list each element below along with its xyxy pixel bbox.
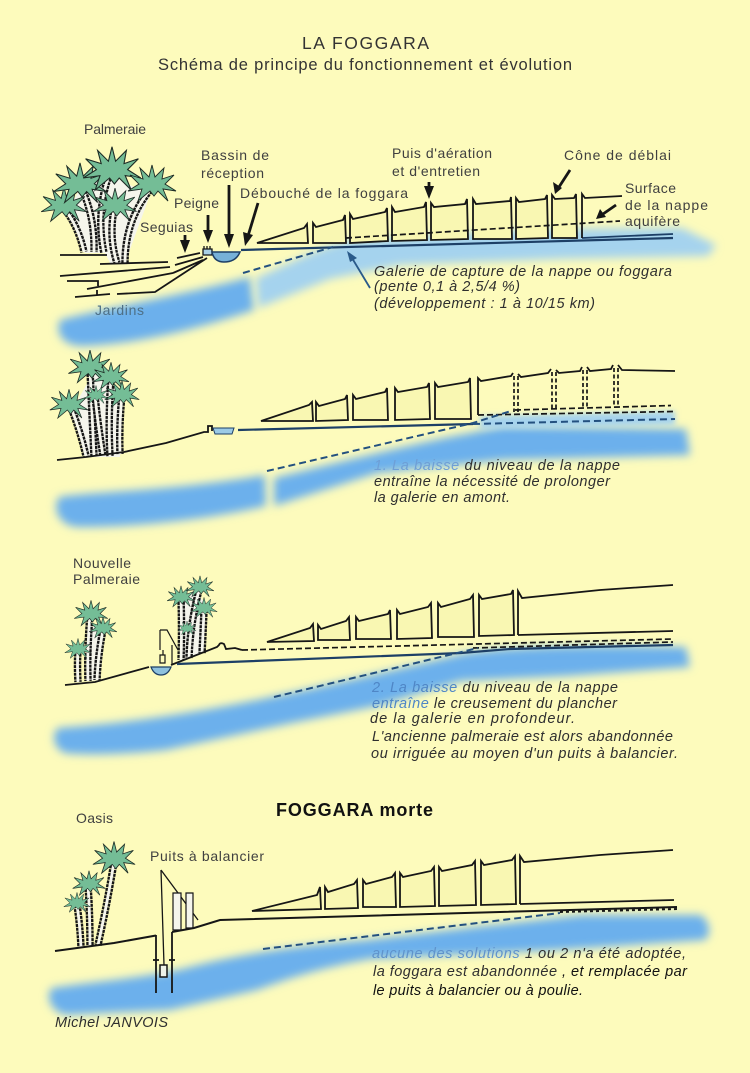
water table dashed line <box>346 221 620 238</box>
reception basin <box>212 252 240 262</box>
dashed levels <box>242 639 673 697</box>
ground profile <box>55 907 677 951</box>
upstream water surface line <box>582 234 673 238</box>
water table <box>49 915 709 1015</box>
title: LA FOGGARA <box>302 33 429 53</box>
former water level dashed line <box>243 247 333 273</box>
pond <box>151 667 171 675</box>
water table <box>56 411 690 527</box>
label: Nouvelle Palmeraie: Palmeraie <box>73 571 140 587</box>
caption 2: ou irriguée au moyen d'un puits à balancier. <box>371 746 678 762</box>
panel: solution 1, prolongement <box>50 350 690 527</box>
palm grove <box>41 147 176 263</box>
label: Nouvelle Palmeraie: Nouvelle <box>73 555 131 571</box>
label: Nouvelle Palmeraie <box>73 555 140 587</box>
palms <box>64 842 135 947</box>
caption 3: la foggara est abandonnée , et remplacée par <box>373 964 688 980</box>
aeration wells <box>252 850 674 911</box>
labels: Palmeraie <box>84 121 146 137</box>
gallery line <box>177 645 673 664</box>
gardens and irrigation channels <box>60 253 207 297</box>
subtitle: Schéma de principe du fonctionnement et évolution <box>158 56 572 74</box>
old palm grove <box>65 600 117 682</box>
dead water level dashed <box>263 909 677 949</box>
panel: solution 2, creusement <box>54 555 690 762</box>
aeration wells <box>261 365 675 421</box>
labels: Jardins <box>95 302 144 318</box>
labels: Puis d'aération <box>392 145 492 161</box>
aeration wells <box>257 194 622 243</box>
heading: FOGGARA morte <box>276 800 433 820</box>
palm grove <box>50 350 139 457</box>
labels <box>84 121 708 318</box>
labels <box>76 810 264 864</box>
labels: de la nappe <box>625 197 708 213</box>
caption 3: le puits à balancier ou à poulie. <box>373 983 583 999</box>
caption 2: entraîne le creusement du plancher <box>372 696 618 712</box>
arrows <box>180 170 616 288</box>
caption 1 <box>374 458 620 506</box>
balancing well <box>160 630 178 664</box>
caption 3 <box>372 946 688 999</box>
caption: galerie: (pente 0,1 à 2,5/4 %) <box>374 279 520 295</box>
labels: aquifère <box>625 213 680 229</box>
labels: Seguias <box>140 219 193 235</box>
ground profile <box>57 426 212 460</box>
new palm grove <box>167 576 217 660</box>
labels: et d'entretien <box>392 163 480 179</box>
peigne structure <box>203 246 212 255</box>
gallery line <box>238 424 473 430</box>
caption 3: aucune des solutions 1 ou 2 n'a été adoptée, <box>372 946 686 962</box>
ground profile <box>65 643 242 685</box>
labels: Puits à balancier <box>150 848 264 864</box>
water table: aquifer <box>58 228 716 346</box>
caption 1: 1. La baisse du niveau de la nappe <box>374 458 620 474</box>
gallery line <box>241 238 673 250</box>
labels: Débouché de la foggara <box>240 185 408 201</box>
dashed levels <box>267 406 675 471</box>
panel: foggara en fonctionnement <box>41 121 716 346</box>
caption 2: 2. La baisse du niveau de la nappe <box>371 680 618 696</box>
labels: Bassin de <box>201 147 269 163</box>
labels: Surface <box>625 180 676 196</box>
aeration wells <box>267 585 673 642</box>
panel: foggara morte <box>49 800 709 1031</box>
labels: Oasis <box>76 810 113 826</box>
labels: Cône de déblai <box>564 147 671 163</box>
water table <box>54 646 690 754</box>
caption 2: L'ancienne palmeraie est alors abandonnée <box>372 729 673 745</box>
caption 2: de la galerie en profondeur. <box>370 711 575 727</box>
author credit: Michel JANVOIS <box>55 1015 168 1031</box>
balancing well <box>153 870 198 993</box>
caption: galerie: Galerie de capture de la nappe ou foggara <box>374 264 672 280</box>
caption 1: entraîne la nécessité de prolonger <box>374 474 611 490</box>
outlet pond <box>213 428 234 434</box>
caption 1: la galerie en amont. <box>374 490 510 506</box>
caption 2 <box>370 680 678 762</box>
labels: Peigne <box>174 195 219 211</box>
caption: galerie: (développement : 1 à 10/15 km) <box>374 296 595 312</box>
labels: réception <box>201 165 264 181</box>
caption: galerie <box>374 264 672 312</box>
